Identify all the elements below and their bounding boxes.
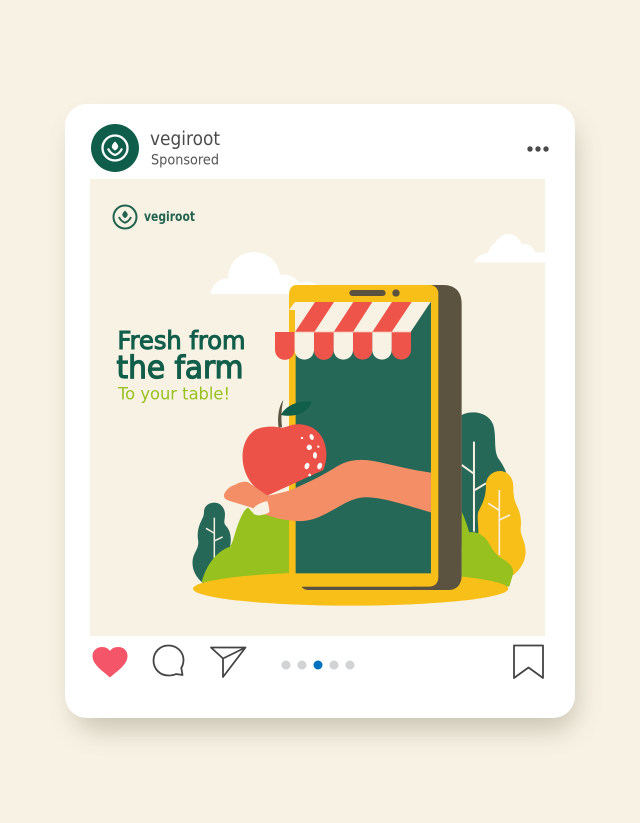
account name: vegiroot [150, 129, 220, 150]
panel: advert image [90, 179, 550, 636]
apple [243, 400, 326, 496]
smartphone [289, 285, 462, 590]
cloud right [474, 234, 550, 262]
tree: right teal [462, 412, 510, 545]
logo: vegiroot: vegiroot [144, 210, 195, 225]
logo: vegiroot [114, 206, 195, 228]
illustration scene [192, 285, 526, 606]
headline: To your table! [117, 384, 230, 404]
icon: heart [92, 647, 128, 678]
icon: share [211, 648, 246, 677]
icon: comment [154, 646, 184, 676]
shop awning [275, 302, 431, 360]
bush: left green [202, 508, 292, 582]
tree: left teal [192, 503, 231, 583]
card shadow [74, 122, 576, 730]
panel: post card [65, 104, 575, 718]
carousel dots [282, 660, 354, 670]
tree: right yellow [478, 471, 526, 575]
headline: the farm [116, 350, 244, 386]
icon: more menu [527, 146, 549, 152]
cloud left [211, 252, 318, 294]
headline [116, 326, 246, 404]
sponsored label: Sponsored [151, 152, 219, 168]
ground ellipse [193, 572, 508, 606]
icon: bookmark [514, 646, 543, 678]
bush: right green [462, 512, 513, 587]
avatar: vegiroot logo [91, 124, 139, 172]
headline: Fresh from [118, 326, 246, 355]
arm and hand [224, 460, 431, 521]
social post infographic [62, 104, 588, 742]
